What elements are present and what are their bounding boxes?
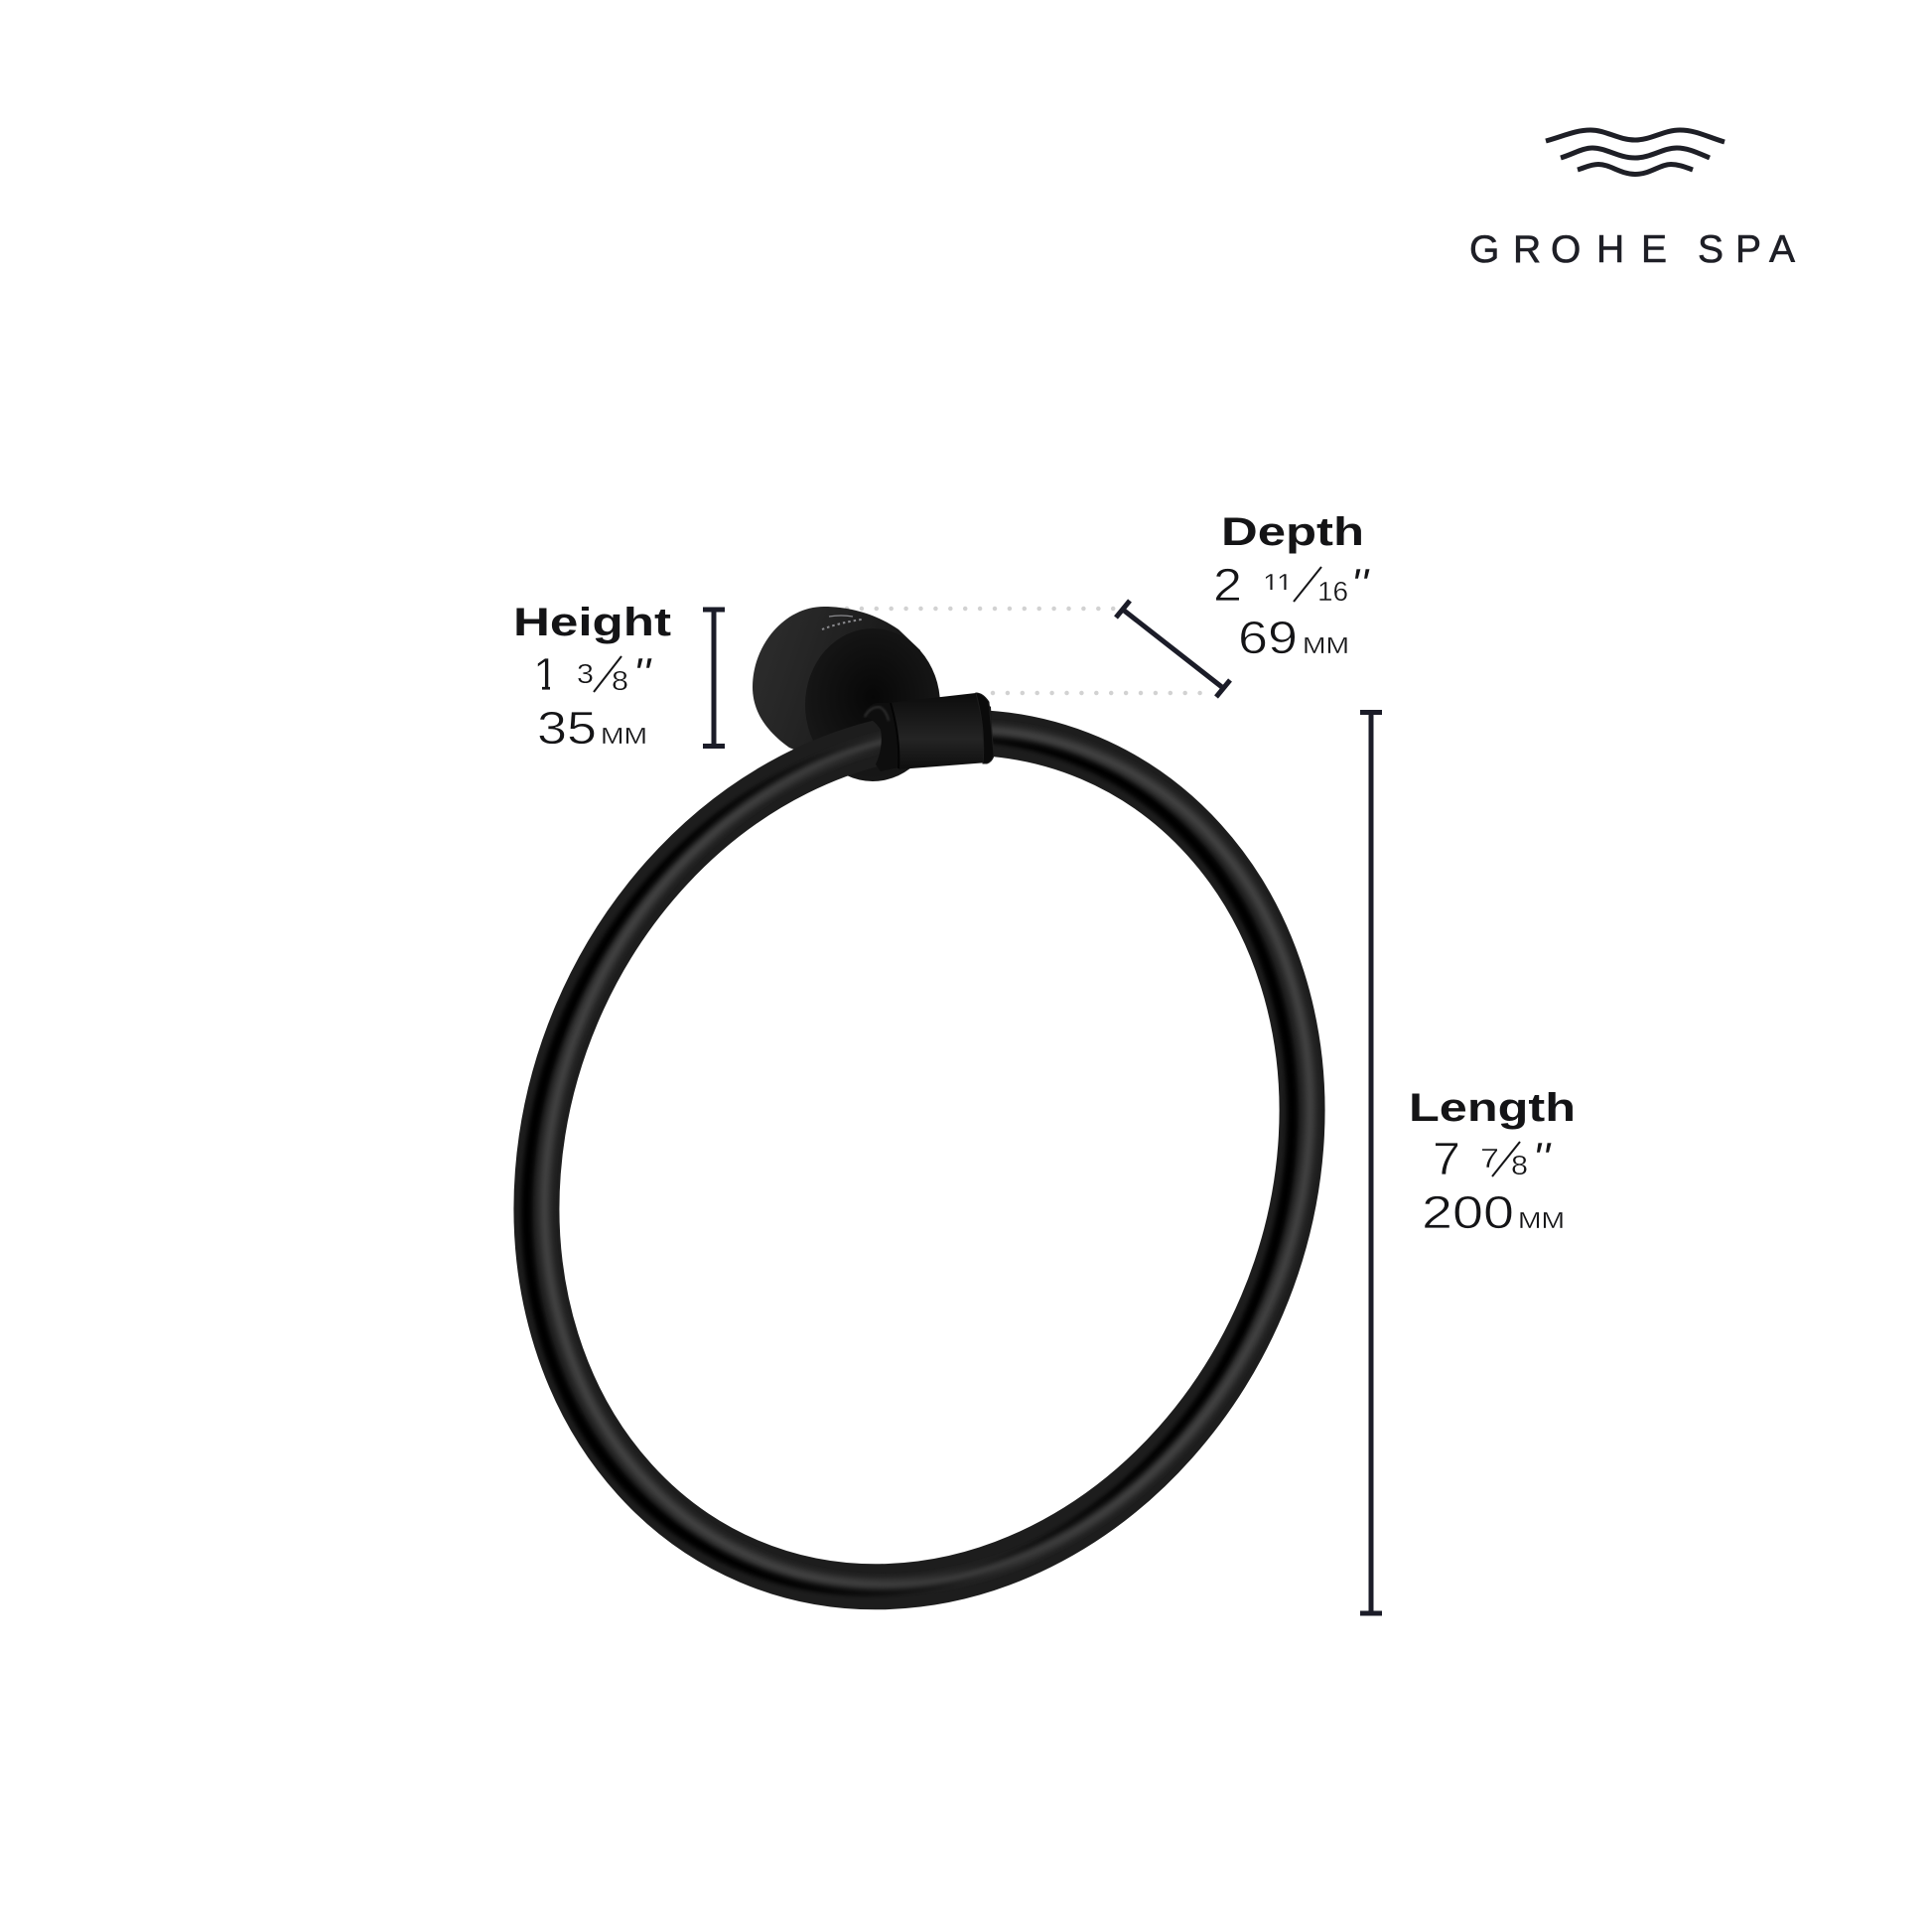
label: length: " xyxy=(1532,1133,1553,1184)
height dimension bar xyxy=(703,609,725,747)
logo wordmark: GROHE SPA xyxy=(1469,228,1795,271)
label: length: 7 xyxy=(1433,1133,1460,1184)
label: length: MM xyxy=(1518,1207,1565,1233)
label: depth: Depth xyxy=(1221,510,1364,554)
wall mount xyxy=(753,607,940,781)
length dimension bar xyxy=(1360,712,1382,1613)
label: height: " xyxy=(632,648,653,700)
icon: water waves xyxy=(1546,130,1725,175)
ring tube xyxy=(396,611,1441,1710)
mount engraved logo xyxy=(822,616,862,629)
collar xyxy=(862,693,994,771)
label: height xyxy=(516,607,671,745)
label: depth: " xyxy=(1350,559,1371,611)
label: depth: 16 xyxy=(1317,576,1348,607)
towel ring xyxy=(396,607,1441,1710)
label: depth: 11 xyxy=(1263,568,1293,599)
label: depth xyxy=(1216,516,1370,653)
label: length: Length xyxy=(1409,1086,1576,1130)
dotted guide lines for depth xyxy=(847,609,1206,693)
label: height: MM xyxy=(601,723,647,749)
label: depth: 69 xyxy=(1238,612,1298,663)
depth dimension bar xyxy=(1116,601,1230,697)
label: height: Height xyxy=(513,601,671,644)
label: length: 8 xyxy=(1511,1150,1528,1180)
label: length: 200 xyxy=(1422,1186,1514,1238)
label: height: 1 xyxy=(533,648,559,700)
label: depth: 2 xyxy=(1213,559,1242,611)
label: length: 7 xyxy=(1480,1143,1499,1173)
label: height: 8 xyxy=(612,665,628,696)
label: depth: MM xyxy=(1303,632,1349,658)
label: height: 3 xyxy=(577,658,594,689)
label: length xyxy=(1409,1086,1576,1238)
logo: Grohe Spa xyxy=(1469,130,1795,271)
label: height: 35 xyxy=(537,702,597,754)
